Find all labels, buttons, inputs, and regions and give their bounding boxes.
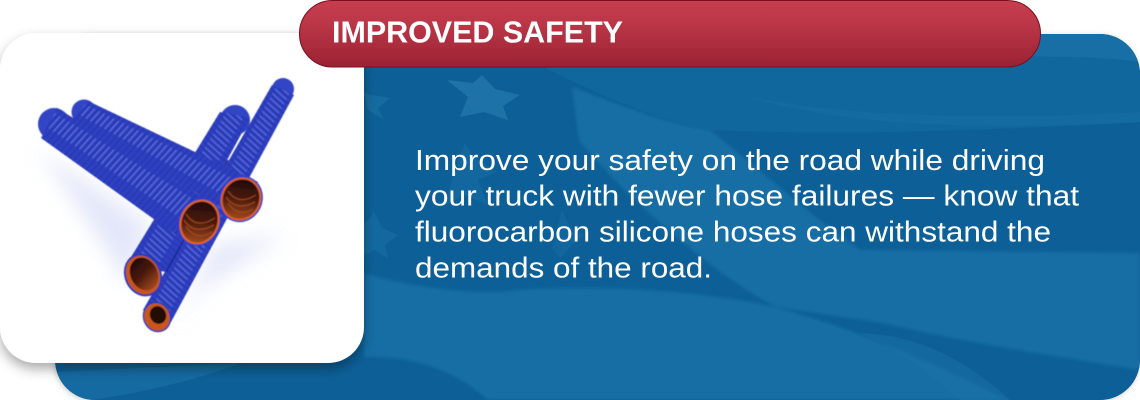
hose: front wide bbox=[38, 108, 207, 238]
hose: right long bbox=[143, 78, 294, 322]
hose product photo bbox=[38, 78, 294, 337]
body text: demands of the road. bbox=[415, 252, 712, 284]
hose: smallest end opening bbox=[138, 297, 176, 337]
hose: upper wide bbox=[72, 100, 258, 208]
soft floor shadow bbox=[40, 150, 285, 325]
heading text: IMPROVED SAFETY bbox=[332, 14, 623, 50]
hose: small end opening bbox=[117, 247, 169, 303]
body text: Improve your safety on the road while driving bbox=[415, 145, 1045, 177]
hose: upper wide opening bbox=[212, 169, 270, 229]
panel: white product card bbox=[0, 33, 364, 363]
hose: middle back bbox=[126, 105, 250, 272]
body text: fluorocarbon silicone hoses can withstand the bbox=[415, 216, 1051, 248]
stars bbox=[364, 75, 520, 257]
body text bbox=[415, 145, 1079, 284]
hose: front wide opening bbox=[170, 191, 229, 253]
red heading bar bbox=[300, 0, 1040, 67]
body text: your truck with fewer hose failures — know that bbox=[415, 180, 1079, 212]
